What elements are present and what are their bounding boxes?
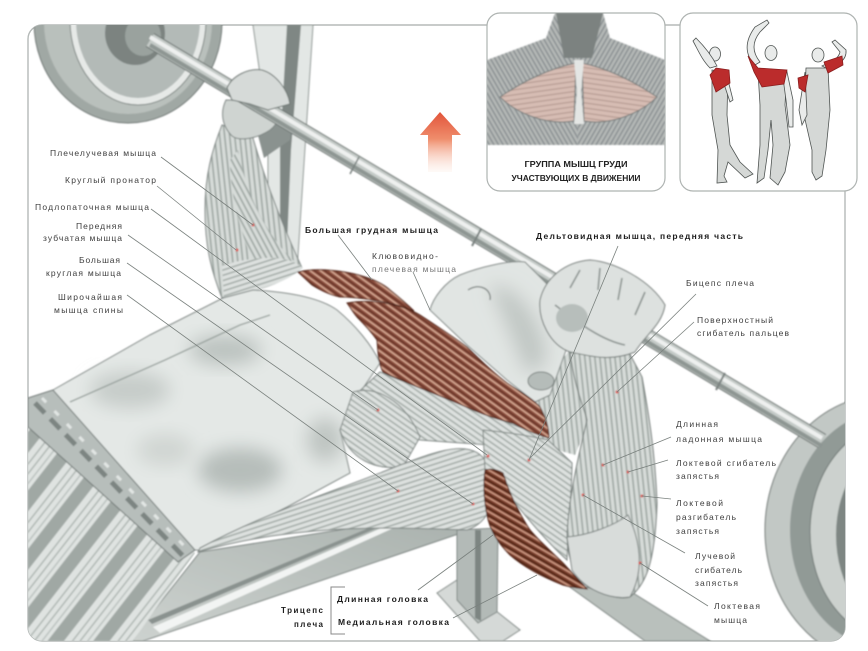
label: Плечелучевая мышца: Плечелучевая мышца: [50, 148, 156, 158]
label: Локтевая мышца: [714, 601, 760, 625]
label: Большая круглая мышца: Большая: [79, 255, 120, 265]
left fist fingers: [227, 70, 290, 110]
barbell bar: [150, 37, 822, 446]
label: Подлопаточная мышца: Подлопаточная мышца: [35, 202, 149, 212]
label: Трицепс плеча: Трицепс: [281, 606, 324, 615]
label: Клювовидно-плечевая мышца: плечевая мышца: [372, 264, 456, 274]
panel: chest muscle group: УЧАСТВУЮЩИХ В ДВИЖЕНИИ: [512, 173, 640, 183]
bench leg and foot: [437, 528, 520, 641]
label: Клювовидно-плечевая мышца: Клювовидно-: [372, 251, 438, 261]
trousers: [28, 405, 195, 641]
label: Локтевая мышца: Локтевая: [714, 601, 760, 611]
head: [430, 262, 566, 402]
figure left: [693, 38, 753, 183]
neck: [556, 13, 603, 58]
label: Локтевой разгибатель запястья: [676, 498, 737, 536]
caption: ГРУППА МЫШЦ ГРУДИ: [524, 159, 628, 169]
label: Широчайшая мышца спины: Широчайшая: [58, 292, 122, 302]
label: Локтевой разгибатель запястья: Локтевой: [676, 498, 723, 508]
label: Широчайшая мышца спины: [54, 292, 123, 315]
pectoralis major (red): [298, 270, 549, 438]
label: Локтевой сгибатель запястья: Локтевой сгибатель: [676, 458, 777, 468]
label: Трицепс плеча: [281, 606, 324, 629]
label: Передняя зубчатая мышца: Передняя: [76, 221, 122, 231]
label: Длинная ладонная мышца: [676, 419, 762, 444]
label: Большая круглая мышца: круглая мышца: [46, 268, 121, 278]
label: Медиальная головка: Медиальная головка: [338, 617, 449, 627]
neck muscles: [536, 352, 588, 456]
label: Большая круглая мышца: [46, 255, 121, 278]
right pectoral: [582, 63, 657, 122]
torso: [53, 290, 380, 550]
triceps (red): [484, 469, 587, 589]
label: Клювовидно-плечевая мышца: [372, 251, 456, 274]
figure right: [798, 40, 846, 180]
trouser waistband: [28, 390, 195, 562]
right forearm: [567, 345, 657, 598]
label: Лучевой сгибатель запястья: [695, 551, 743, 588]
label: Большая грудная мышца: Большая грудная мышца: [305, 225, 438, 235]
label: Лучевой сгибатель запястья: сгибатель: [695, 565, 743, 575]
label: Длинная головка: Длинная головка: [337, 594, 428, 604]
bench: [130, 520, 470, 641]
bracket: triceps heads: [331, 587, 345, 634]
label: Широчайшая мышца спины: мышца спины: [54, 305, 123, 315]
figure centre: [747, 20, 793, 185]
label: Лучевой сгибатель запястья: Лучевой: [695, 551, 735, 561]
label: Трицепс плеча: плеча: [294, 620, 324, 629]
arrow: upward movement: [420, 112, 461, 172]
right fist: [540, 260, 665, 357]
label: Передняя зубчатая мышца: [43, 221, 122, 243]
label: Поверхностный сгибатель пальцев: сгибатель пальцев: [697, 328, 789, 338]
bench lower right: [567, 585, 710, 641]
panel: chest muscle group: [487, 13, 665, 191]
label: Передняя зубчатая мышца: зубчатая мышца: [43, 233, 122, 243]
label: Лучевой сгибатель запястья: запястья: [695, 578, 738, 588]
label: Локтевой сгибатель запястья: [676, 458, 777, 481]
wrist under the bar: [223, 100, 278, 139]
latissimus and arm band: [198, 449, 493, 552]
label: Локтевой сгибатель запястья: запястья: [676, 471, 719, 481]
label: Дельтовидная мышца, передняя часть: Дельтовидная мышца, передняя часть: [536, 231, 743, 241]
label: Длинная ладонная мышца: ладонная мышца: [676, 434, 762, 444]
leader lines: [127, 157, 708, 618]
barbell plate right: [765, 395, 868, 651]
chest drawing: [487, 13, 665, 145]
label: Поверхностный сгибатель пальцев: Поверхностный: [697, 315, 773, 325]
label: Поверхностный сгибатель пальцев: [697, 315, 789, 338]
label: Локтевой разгибатель запястья: запястья: [676, 526, 719, 536]
label: Круглый пронатор: Круглый пронатор: [65, 175, 156, 185]
label: Бицепс плеча: Бицепс плеча: [686, 278, 754, 288]
deltoid: [483, 430, 572, 560]
panel: three figures: [680, 13, 857, 191]
under-pectoral muscles: [340, 372, 560, 468]
sternum: [574, 60, 584, 124]
left pectoral: [500, 63, 576, 122]
label: Локтевой разгибатель запястья: разгибатель: [676, 512, 737, 522]
rack upright: [253, 25, 313, 270]
label: Длинная ладонная мышца: Длинная: [676, 419, 718, 429]
left forearm: [205, 125, 303, 298]
barbell plate left: [34, 0, 222, 123]
label: Локтевая мышца: мышца: [714, 615, 747, 625]
